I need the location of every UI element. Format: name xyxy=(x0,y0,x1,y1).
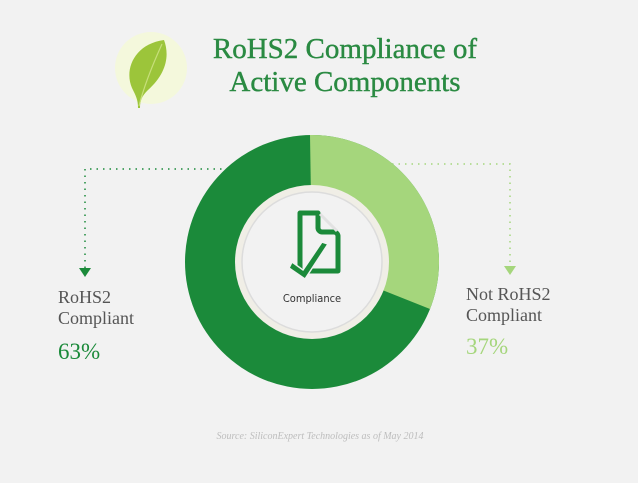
icon: leaf xyxy=(115,32,187,108)
slice: not compliant xyxy=(310,135,439,309)
label: compliant: Compliant xyxy=(58,308,134,328)
connector: right dotted arrow xyxy=(340,164,516,275)
label: compliant xyxy=(58,287,134,364)
title: Active Components xyxy=(229,66,461,98)
source: Source: SiliconExpert Technologies as of May 2014 xyxy=(216,431,424,442)
label: compliant: 63% xyxy=(58,339,100,364)
icon: document check xyxy=(300,213,338,271)
center circle xyxy=(235,185,389,339)
label: not compliant xyxy=(466,284,551,359)
label: not compliant: 37% xyxy=(466,334,508,359)
title xyxy=(213,33,478,98)
center label: Compliance xyxy=(283,292,341,305)
label: compliant: RoHS2 xyxy=(58,287,111,307)
label: not compliant: Compliant xyxy=(466,305,542,325)
label: not compliant: Not RoHS2 xyxy=(466,284,551,304)
title: RoHS2 Compliance of xyxy=(213,33,477,65)
